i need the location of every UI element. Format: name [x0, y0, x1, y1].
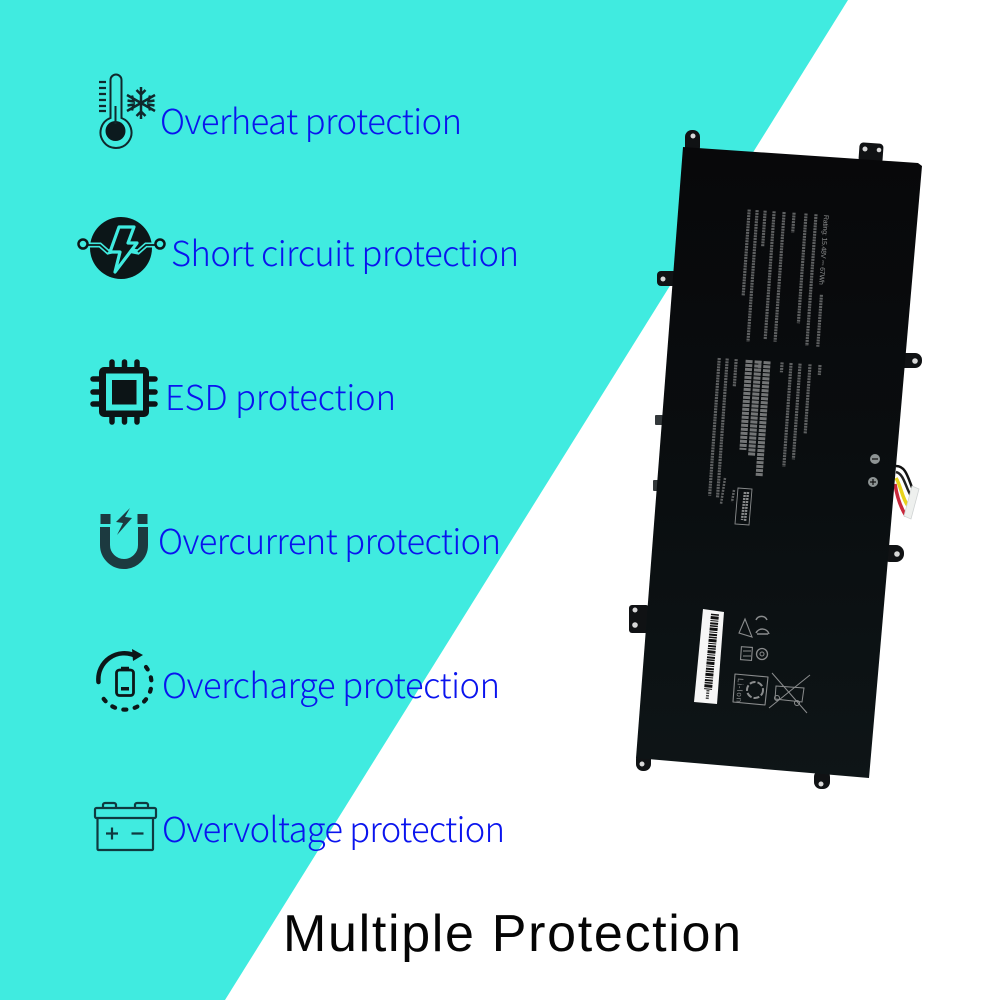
title: Multiple Protection [283, 905, 741, 963]
battery: white barcode label [694, 609, 724, 704]
icon: car battery [95, 803, 156, 850]
battery: certification symbols [739, 616, 769, 660]
battery: mounting tabs [629, 130, 922, 789]
battery: regulatory text block [709, 358, 820, 505]
battery: rating label text block: Rating: 15.48V ⎓ 67Wh [817, 215, 829, 285]
label: ESD protection: ESD protection [165, 370, 396, 420]
icon: thermometer and snowflake [99, 74, 155, 148]
icon: ESD chip [93, 362, 155, 422]
wiring harness and connector [895, 466, 919, 519]
battery: Li-ion recycling mark: Li-Ion [734, 678, 745, 702]
label: overcurrent protection: Overcurrent protection [158, 514, 501, 564]
battery: rating label text block [740, 210, 829, 347]
icon: short circuit [78, 217, 164, 279]
battery: polarity terminals [868, 454, 880, 487]
battery: crossed-out bin mark [769, 673, 810, 713]
label: overcharge protection: Overcharge protection [162, 658, 500, 708]
label: overheat protection: Overheat protection [160, 94, 462, 144]
icon: magnet with bolt [100, 508, 148, 564]
label: short circuit protection: Short circuit protection [171, 226, 519, 276]
battery: tab holes [632, 134, 918, 786]
battery: small boxed mark [721, 478, 752, 525]
label: overvoltage protection: Overvoltage protection [162, 802, 505, 852]
icon: overcharge battery cycle [98, 649, 151, 710]
battery: main body [636, 147, 922, 778]
battery: Li-ion recycling mark [733, 674, 768, 705]
